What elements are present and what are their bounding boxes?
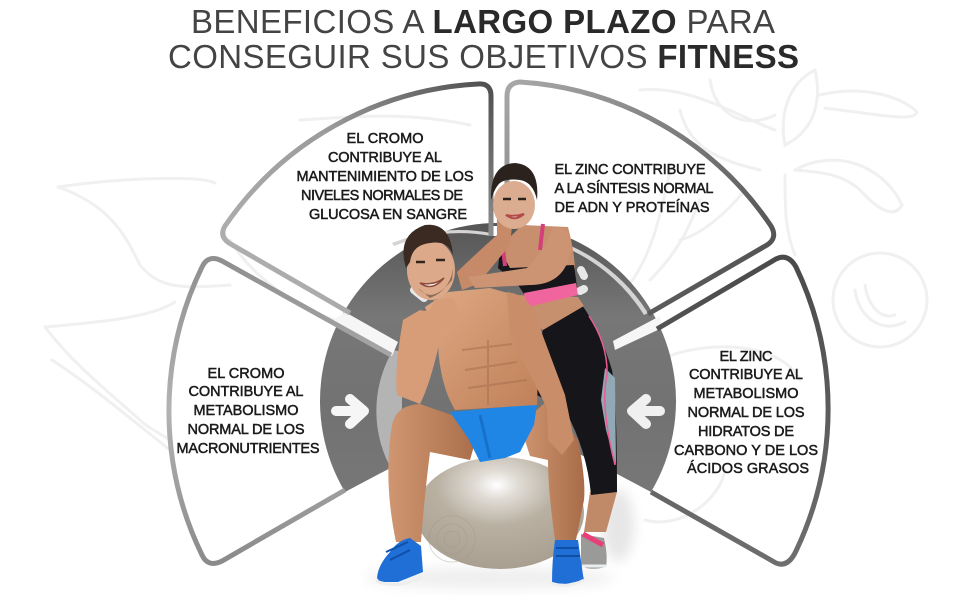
woman midriff [515,295,584,330]
man straight arm [507,292,574,455]
panel text: GLUCOSA EN SANGRE [309,207,467,223]
panel text: NORMAL DE LOS [688,405,804,421]
panel text: EL CROMO [346,131,424,147]
icon: arrow up right partly hidden [580,270,584,291]
title line 1: BENEFICIOS A LARGO PLAZO PARA [191,3,775,40]
woman arms [457,216,512,290]
icon: arrow right [336,399,364,424]
panel text: METABOLISMO [194,403,298,419]
woman leggings [533,305,617,495]
panel text: NIVELES NORMALES DE [301,188,463,204]
woman head [493,181,535,229]
man head [407,240,455,300]
panel text: HIDRATOS DE [698,424,794,440]
shadow beside woman leg [602,489,634,561]
figure: woman [457,163,617,569]
icon: arrow left [632,399,660,424]
background botanical watermark [45,70,927,522]
panel text: DE ADN Y PROTEÍNAS [554,199,710,216]
panel text: METABOLISMO [694,386,798,402]
left blue shoe [377,538,423,582]
title [168,3,799,75]
panel text: ÁCIDOS GRASOS [687,460,809,477]
man shorts [450,404,537,462]
man torso [425,288,538,410]
panel: chromium macronutrients (left) [169,259,391,563]
panel text: CONTRIBUYE AL [188,384,304,400]
white vertical gap [493,226,505,236]
floor shadow [365,567,615,589]
exercise ball [416,457,584,569]
right blue shoe [552,540,584,584]
woman calf [584,492,617,532]
leggings side panel [601,368,616,465]
shoes [376,538,584,585]
ball valve rings [429,516,475,562]
woman shoe [581,534,607,569]
panel: zinc DNA and proteins (top right) [507,82,774,314]
panel text: CONTRIBUYE AL [328,150,442,166]
panel: zinc carbohydrate and fat metabolism (right) [651,257,828,564]
panel text: MANTENIMIENTO DE LOS [296,169,474,185]
panel: chromium glucose (top left) [223,84,491,313]
figure: man [388,225,584,542]
man left leg [388,404,480,542]
woman chest and shoulders [502,225,575,270]
panel text: EL CROMO [208,366,284,382]
title line 2: CONSEGUIR SUS OBJETIVOS FITNESS [168,38,799,75]
white divider band left [330,312,398,356]
leggings pink seam [589,316,615,465]
woman sports top [498,250,577,300]
icon: arrow up left partly hidden [414,282,424,298]
panel text: NORMAL DE LOS [188,422,304,438]
white divider band right [613,316,662,350]
panel text: EL ZINC CONTRIBUYE [554,162,706,178]
panel text: A LA SÍNTESIS NORMAL [554,180,714,197]
panel text: CARBONO Y DE LOS [674,443,818,459]
central grey ring [320,223,676,492]
panel text: CONTRIBUYE AL [689,367,803,383]
man right leg [520,400,584,540]
panel text: MACRONUTRIENTES [176,441,320,457]
man bent arm [396,298,463,404]
panel text: EL ZINC [720,349,772,365]
abdominal shading [462,340,527,405]
